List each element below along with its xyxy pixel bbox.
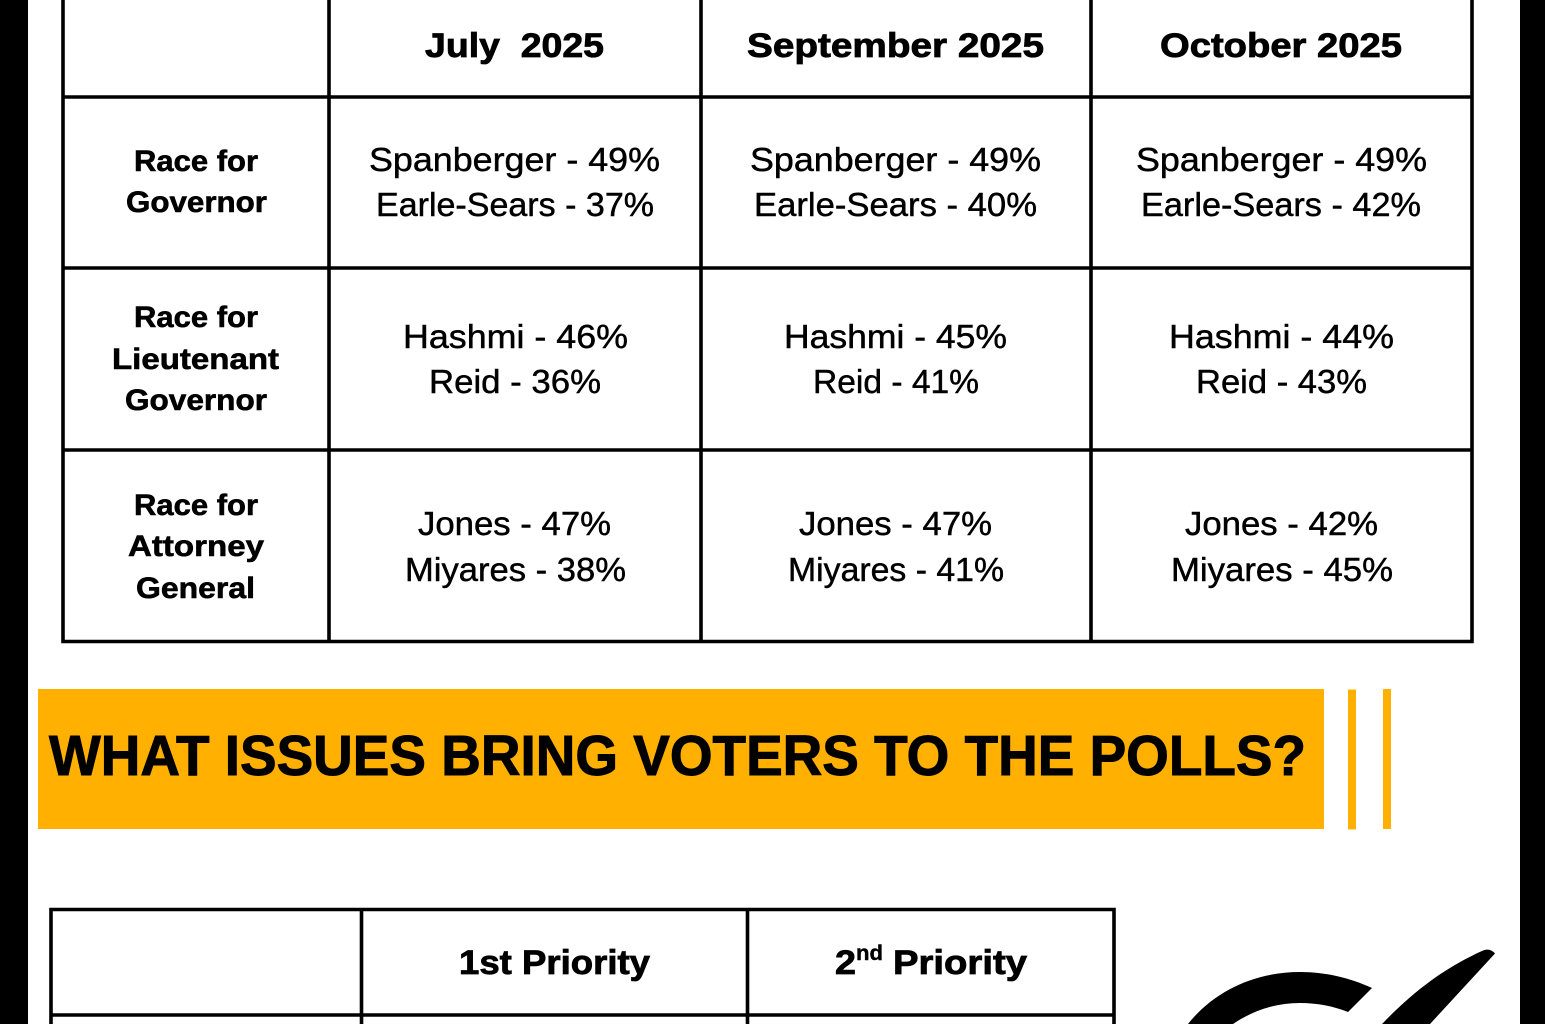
panel: polling table [61, 0, 1474, 642]
row label: Race for Lieutenant Governor: Race for [134, 301, 258, 334]
October lieutenant governor results [1169, 318, 1394, 400]
October attorney general results: Miyares - 45% [1171, 551, 1393, 588]
row label: Race for Attorney General: Attorney [128, 530, 264, 563]
October lieutenant governor results: Hashmi - 44% [1169, 318, 1394, 355]
September governor results: Earle-Sears - 40% [754, 186, 1037, 223]
September lieutenant governor results: Hashmi - 45% [784, 318, 1007, 355]
September attorney general results: Jones - 47% [799, 505, 992, 542]
July lieutenant governor results: Hashmi - 46% [403, 318, 628, 355]
July attorney general results [405, 505, 626, 588]
banner accent stripes [1348, 689, 1391, 830]
row label: Race for Lieutenant Governor: Lieutenant [112, 343, 279, 376]
row label: Race for Attorney General: General [136, 572, 255, 605]
column heading: September 2025: September 2025 [747, 27, 1044, 65]
September attorney general results [788, 505, 1004, 588]
row label: Race for Governor [126, 145, 267, 219]
September lieutenant governor results: Reid - 41% [813, 363, 979, 400]
banner: section heading [38, 689, 1324, 829]
July governor results [369, 141, 660, 223]
column heading: July 2025: July 2025 [425, 27, 604, 65]
July lieutenant governor results: Reid - 36% [429, 363, 601, 400]
icon: checkmark over circle [1188, 950, 1495, 1024]
right black side bar [1520, 0, 1545, 1024]
row label: Race for Lieutenant Governor [112, 301, 279, 417]
column heading: 2nd Priority [835, 942, 1027, 982]
October attorney general results [1171, 505, 1393, 588]
July attorney general results: Miyares - 38% [405, 551, 626, 588]
row label: Race for Lieutenant Governor: Governor [125, 384, 267, 417]
October governor results: Spanberger - 49% [1136, 141, 1427, 178]
left black side bar [0, 0, 28, 1024]
column heading: 1st Priority: 1st Priority [459, 944, 650, 982]
September attorney general results: Miyares - 41% [788, 551, 1004, 588]
table grid lines [61, 0, 1474, 642]
column heading: 2nd Priority: 2 [835, 944, 856, 982]
row label: Race for Attorney General: Race for [134, 489, 258, 522]
row label: Race for Governor: Governor [126, 186, 267, 219]
September governor results: Spanberger - 49% [750, 141, 1041, 178]
July governor results: Earle-Sears - 37% [376, 186, 654, 223]
column heading: 2nd Priority: nd [856, 942, 883, 965]
October attorney general results: Jones - 42% [1185, 505, 1378, 542]
September lieutenant governor results [784, 318, 1007, 400]
column heading: October 2025: October 2025 [1160, 27, 1402, 65]
October lieutenant governor results: Reid - 43% [1196, 363, 1367, 400]
row label: Race for Governor: Race for [134, 145, 258, 178]
July lieutenant governor results [403, 318, 628, 400]
October governor results: Earle-Sears - 42% [1141, 186, 1421, 223]
column heading: 2nd Priority: Priority [893, 944, 1027, 982]
October governor results [1136, 141, 1427, 223]
July attorney general results: Jones - 47% [418, 505, 611, 542]
panel: priorities table [49, 909, 1116, 1024]
priorities table grid lines [49, 909, 1116, 1024]
September governor results [750, 141, 1041, 223]
July governor results: Spanberger - 49% [369, 141, 660, 178]
banner: section heading: WHAT ISSUES BRING VOTERS TO THE POLLS? [49, 724, 1306, 788]
row label: Race for Attorney General [128, 489, 264, 605]
